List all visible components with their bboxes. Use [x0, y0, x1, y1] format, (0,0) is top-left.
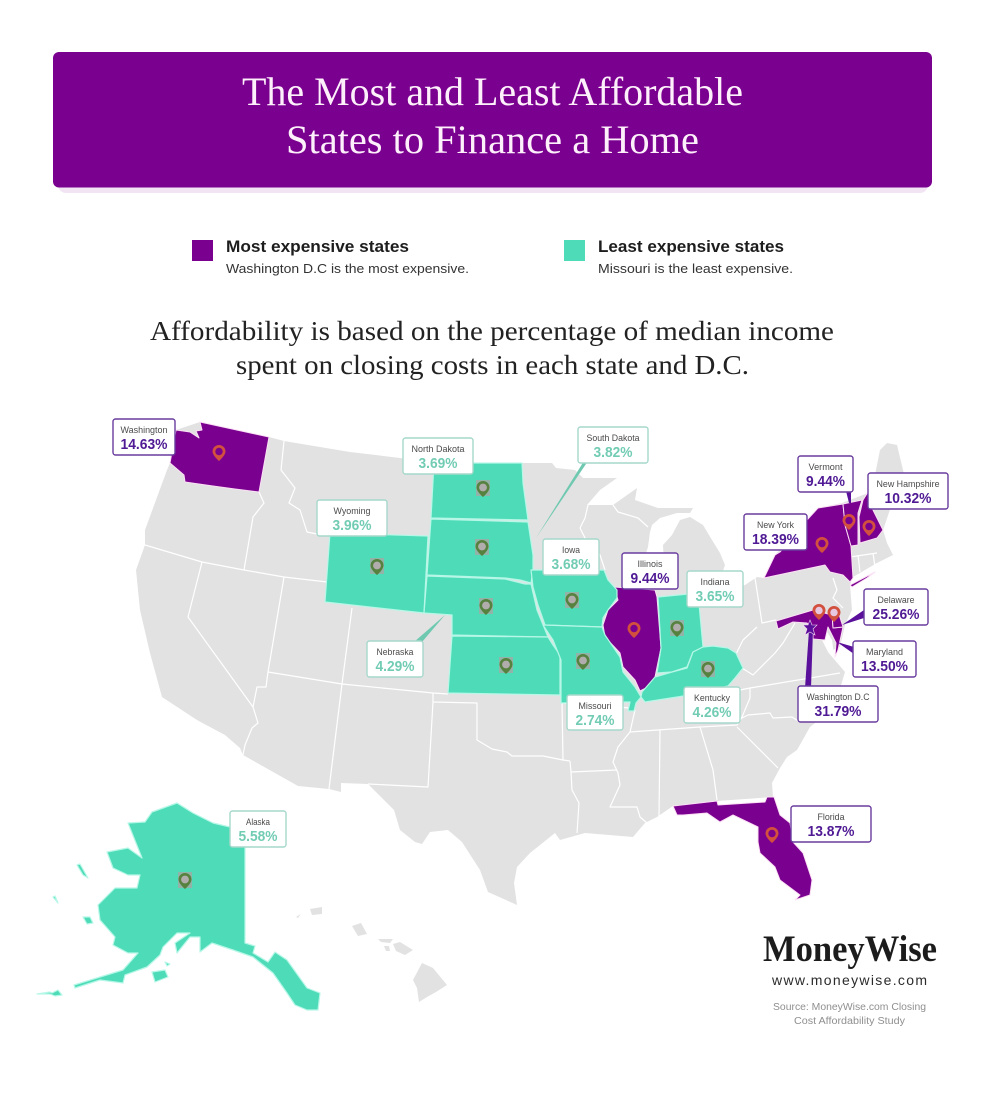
label: Indiana — [687, 571, 743, 607]
label: New Hampshire: 10.32% — [884, 491, 932, 507]
legend: most expensive: Most expensive states — [226, 238, 409, 256]
label: Iowa: Iowa — [562, 545, 581, 556]
most expensive states — [170, 422, 883, 900]
label: Missouri: 2.74% — [576, 713, 615, 729]
label: Florida — [791, 806, 871, 842]
label: North Dakota: 3.69% — [418, 456, 458, 472]
subheading: Affordability is based on the percentage of median income — [150, 316, 834, 346]
legend: most expensive — [192, 238, 469, 276]
DC leader line — [805, 630, 813, 688]
Delaware leader line — [842, 610, 864, 625]
label: Washington D.C: 31.79% — [814, 704, 862, 720]
label: Alaska — [230, 811, 286, 847]
label: Delaware — [864, 589, 928, 625]
legend: most expensive: Washington D.C is the most expensive. — [226, 262, 469, 276]
label: Maryland: Maryland — [866, 647, 903, 658]
label: Vermont: 9.44% — [806, 474, 845, 490]
label: Washington D.C: Washington D.C — [806, 692, 870, 703]
source note — [773, 1002, 926, 1027]
label: Wyoming: 3.96% — [332, 518, 372, 534]
legend: least expensive — [564, 238, 793, 276]
label: Missouri — [567, 695, 623, 730]
title text: States to Finance a Home — [286, 117, 699, 162]
label: South Dakota — [578, 427, 648, 463]
label: Nebraska: 4.29% — [376, 659, 415, 675]
South Dakota leader line — [536, 461, 588, 538]
label: Washington — [113, 419, 175, 455]
label: Vermont — [798, 456, 853, 492]
source note: Cost Affordability Study — [794, 1016, 905, 1027]
label: Indiana: Indiana — [700, 577, 730, 588]
label: Delaware: 25.26% — [872, 607, 920, 623]
label: Illinois: Illinois — [638, 559, 663, 570]
label: Washington: 14.63% — [120, 437, 168, 453]
label: Florida: Florida — [818, 812, 845, 823]
legend: least expensive: Least expensive states — [598, 238, 784, 256]
subheading: spent on closing costs in each state and D.C. — [236, 350, 749, 380]
title text: The Most and Least Affordable — [242, 69, 743, 114]
label: Kentucky: Kentucky — [694, 693, 730, 704]
label: Nebraska — [367, 641, 423, 677]
label: Washington D.C — [798, 686, 878, 722]
label: Kentucky: 4.26% — [692, 705, 732, 721]
label: New York — [744, 514, 807, 550]
label: Kentucky — [684, 687, 740, 723]
label: Illinois: 9.44% — [630, 571, 670, 587]
label: Maryland — [853, 641, 916, 677]
label: Iowa: 3.68% — [552, 557, 591, 573]
least expensive states — [325, 463, 743, 711]
label: Washington: Washington — [120, 425, 168, 436]
label: Missouri: Missouri — [578, 701, 612, 712]
label: Alaska: 5.58% — [238, 829, 278, 845]
label: Delaware: Delaware — [878, 595, 914, 606]
source note: Source: MoneyWise.com Closing — [773, 1002, 926, 1013]
label: North Dakota: North Dakota — [412, 444, 465, 455]
title text — [242, 69, 743, 162]
label: Iowa — [543, 539, 599, 575]
Maryland leader line — [837, 642, 854, 654]
label: New York: 18.39% — [752, 532, 799, 548]
label: South Dakota: 3.82% — [594, 445, 633, 461]
label: Maryland: 13.50% — [861, 659, 908, 675]
map of the contiguous United States — [136, 422, 905, 905]
label: Indiana: 3.65% — [696, 589, 735, 605]
MoneyWise logo: MoneyWise — [763, 929, 937, 970]
label: New York: New York — [757, 520, 794, 531]
label: Wyoming — [317, 500, 387, 536]
legend: least expensive: Missouri is the least expensive. — [598, 262, 793, 276]
label: New Hampshire — [868, 473, 948, 509]
website url: www.moneywise.com — [771, 972, 927, 988]
title banner — [53, 52, 932, 193]
label: Illinois — [622, 553, 678, 589]
Vermont leader line — [846, 491, 851, 503]
subheading — [150, 316, 834, 380]
DC star marker — [803, 620, 817, 635]
pin markers — [178, 445, 876, 889]
label: Florida: 13.87% — [808, 824, 855, 840]
label: Wyoming: Wyoming — [334, 506, 370, 517]
Alaska — [37, 803, 320, 1010]
Hawaii — [296, 907, 447, 1002]
label: Nebraska: Nebraska — [376, 647, 414, 658]
label: South Dakota: South Dakota — [586, 433, 640, 444]
label: Alaska: Alaska — [246, 817, 271, 828]
label: North Dakota — [403, 438, 473, 474]
label: Vermont: Vermont — [808, 462, 843, 473]
Nebraska leader line — [414, 615, 445, 642]
label: New Hampshire: New Hampshire — [876, 479, 940, 490]
